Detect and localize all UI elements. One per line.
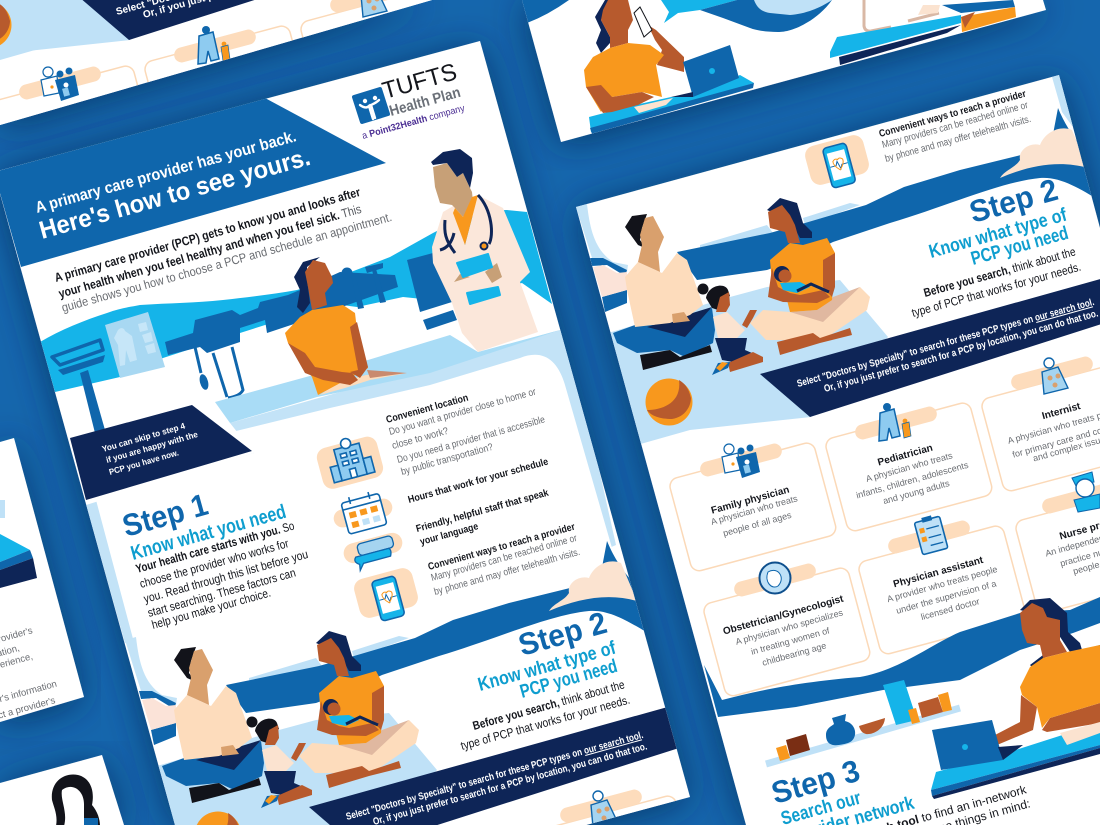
navy band text: Or, if you just prefer to search for a PCP by location, you can do that too.	[372, 741, 649, 825]
top-left page contents	[0, 0, 432, 125]
list text: your language	[419, 521, 480, 548]
step 2 heading: Step 2	[515, 605, 611, 663]
list text: Do you want a provider close to home or	[388, 387, 538, 438]
icon: woman with black hair	[52, 774, 100, 825]
floor	[600, 280, 888, 445]
icon: clipboard	[914, 513, 948, 555]
illustration: patient	[285, 257, 407, 395]
card text: people of all ages	[722, 510, 793, 538]
callout: skip to step 4: PCP you have now.	[108, 447, 180, 477]
wave: left bands	[590, 258, 627, 312]
step 1 and 2 shared artwork	[125, 541, 733, 825]
left strip	[576, 204, 628, 272]
step 2 heading: Know what type of	[476, 637, 619, 696]
top-right page illustration	[520, 0, 1016, 134]
illustration: body chart panel	[105, 312, 165, 378]
list text: by public transportation?	[400, 442, 495, 478]
icon: chat bubbles	[341, 531, 405, 571]
list text: Friendly, helpful staff that speak	[415, 488, 550, 535]
card text: childbearing age	[761, 640, 827, 668]
step 3 heading	[768, 753, 917, 825]
wave: lower band	[704, 597, 1100, 717]
card text: and young adults	[882, 478, 951, 506]
step 1 text: help you make your choice.	[150, 586, 272, 632]
step 3 heading: Step 3	[768, 753, 864, 811]
panel: right page	[576, 75, 1100, 825]
phone item text: Convenient ways to reach a provider	[427, 522, 576, 573]
intro text: your health when you feel healthy and when you feel sick. This	[57, 202, 363, 301]
step 1 item text: by phone and may offer telehealth visits.	[884, 114, 1032, 165]
illustration: weighing scale	[52, 340, 105, 433]
heading text: Here's how to see yours.	[36, 143, 313, 245]
card text: Family physician	[710, 485, 791, 517]
card text: A physician who treats	[710, 493, 799, 527]
icon: internist torso	[1042, 358, 1068, 394]
pale streak above wave	[700, 203, 860, 250]
wave: upper band	[677, 108, 1100, 280]
icon: family physician	[722, 444, 760, 478]
illustration: cyan hills	[40, 210, 552, 392]
phone item text	[427, 522, 581, 598]
logo: Tufts Health Plan: Health Plan	[388, 84, 462, 120]
step 1 heading: Step 1	[119, 487, 212, 544]
list text	[385, 387, 550, 548]
step 1 item text: Convenient ways to reach a provider	[878, 89, 1027, 140]
panel: step 1 light frame	[86, 322, 616, 643]
card text	[710, 401, 1100, 668]
icon: calendar	[332, 489, 394, 534]
left middle page contents	[0, 500, 58, 723]
illustration: family	[613, 198, 870, 375]
card header bars	[698, 355, 1100, 598]
navy band text	[116, 0, 211, 18]
step 2 heading: Step 2	[966, 172, 1062, 230]
card text: A physician who treats	[865, 450, 954, 484]
cloud: left	[593, 265, 627, 297]
panel: top-right page crop	[520, 0, 1046, 142]
list text: Hours that work for your schedule	[407, 456, 550, 506]
list text: Do you need a provider that is accessible	[396, 414, 547, 466]
step 2 text: type of PCP that works for your needs.	[459, 693, 631, 753]
navy band text: Select "Doctors by Specialty" to search for these PCP types on our search tool.	[345, 730, 645, 823]
callout: skip to step 4: You can skip to step 4	[101, 421, 186, 454]
step 1 text: you. Read through this list before you	[142, 547, 310, 606]
card text: A physician who specializes	[734, 607, 845, 647]
card text: A provider who treats people	[886, 564, 998, 604]
step 1 text: Your health care starts with you. So	[134, 519, 296, 576]
phone item text: by phone and may offer telehealth visits.	[433, 547, 581, 598]
step 2 heading	[478, 612, 618, 698]
illustration: woman at laptop	[931, 598, 1100, 799]
logo: Tufts Health Plan	[354, 58, 466, 142]
card text: Obstetrician/Gynecologist	[722, 593, 845, 638]
icon: hospital	[316, 436, 384, 489]
main page contents	[0, 58, 733, 825]
intro text: A primary care provider (PCP) gets to know you and looks after	[53, 185, 362, 285]
panel: top-left page crop	[0, 0, 432, 142]
card text: Pediatrician	[877, 443, 934, 468]
step 1 text: choose the provider who works for	[138, 536, 290, 591]
icon: nurse	[1072, 472, 1100, 512]
step 2 heading	[927, 172, 1071, 270]
panel: main page	[0, 41, 733, 825]
panel: left middle page crop	[0, 438, 84, 723]
cloud: right	[1000, 128, 1088, 178]
step 2 heading: Know what type of	[927, 204, 1070, 263]
illustration: doctor	[431, 149, 538, 352]
step 1 item text: Many providers can be reached online or	[881, 100, 1030, 151]
card text: under the supervision of a	[895, 578, 997, 616]
icon: phone with heartbeat	[803, 133, 871, 188]
navy band	[760, 268, 1100, 417]
intro text: guide shows you how to choose a PCP and schedule an appointment.	[60, 210, 393, 315]
step 1 text: start searching. These factors can	[146, 566, 297, 620]
shelf with objects	[766, 680, 960, 764]
step 2 text: Before you search, think about the	[922, 244, 1077, 300]
step 1 and 2 shared artwork	[576, 108, 1100, 698]
navy band text: Select "Doctors by Specialty" to search for these PCP types on our search tool.	[796, 297, 1096, 390]
icon: obstetrician circle	[760, 562, 790, 594]
heading text: A primary care provider has your back.	[34, 128, 298, 217]
right page contents	[576, 75, 1100, 825]
logo: Tufts Health Plan: TUFTS	[379, 58, 460, 105]
illustration: monitor	[407, 253, 457, 330]
illustration: exam equipment arm	[165, 263, 398, 398]
step 1 heading	[123, 494, 286, 560]
step 1 text	[134, 519, 310, 632]
cards	[668, 361, 1100, 698]
card text: Physician assistant	[892, 555, 985, 590]
list text: Convenient location	[385, 393, 470, 426]
card text: infants, children, adolescents	[855, 460, 970, 500]
panel: bottom-left page crop	[0, 755, 124, 825]
callout: skip to step 4: if you are happy with the	[105, 429, 199, 465]
step 1 heading: Know what you need	[128, 501, 289, 565]
logo: Tufts Health Plan: a Point32Health company	[361, 103, 466, 142]
phone item text: Many providers can be reached online or	[430, 533, 579, 584]
step 2 heading: PCP you need	[969, 223, 1071, 270]
card text: Internist	[1041, 401, 1082, 422]
callout: skip to step 4	[70, 405, 252, 500]
header banner	[0, 98, 386, 267]
step 2 heading: PCP you need	[518, 656, 620, 703]
step 1 item text	[878, 89, 1032, 165]
icon: pediatrician	[879, 403, 911, 441]
list text: close to work?	[391, 426, 450, 452]
card text: in treating women of	[750, 625, 831, 657]
illustration: exam table	[215, 330, 560, 423]
card text: licensed doctor	[920, 596, 981, 622]
icon: ball	[646, 378, 692, 426]
step 2 text: Before you search, think about the	[471, 677, 626, 733]
